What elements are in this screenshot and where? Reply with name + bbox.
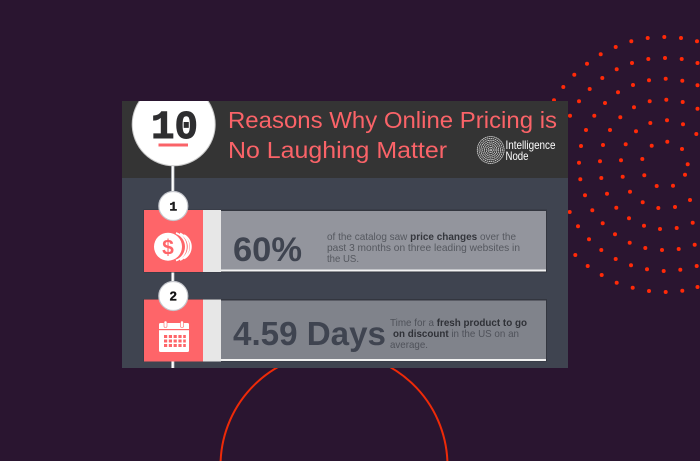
step badge 1 — [159, 192, 188, 220]
icon: calendar — [159, 321, 189, 352]
decorative arc circle — [221, 352, 447, 461]
card 2 coral block — [144, 300, 203, 362]
card 1 grey body — [221, 211, 546, 270]
icon: dollar coins: $ — [162, 236, 174, 260]
card 2 grey body — [221, 300, 546, 359]
card 1 — [144, 210, 547, 272]
timeline connector — [171, 160, 175, 368]
dotted halftone sphere — [552, 35, 700, 294]
card 1 description: of the catalog saw price changes over the — [327, 232, 516, 243]
card 2 description: average. — [390, 340, 428, 351]
step badge 2 — [159, 282, 188, 310]
header band — [122, 101, 568, 178]
card 1 stat: 60% — [233, 231, 302, 269]
card 2 description: Time for a fresh product to go — [390, 318, 527, 329]
title — [228, 107, 557, 163]
card 2 description: on discount in the US on an — [393, 329, 519, 340]
step badge 2: 2 — [170, 288, 177, 304]
icon: dotted sphere — [477, 137, 504, 163]
infographic panel — [122, 83, 568, 368]
card 1 description: the US. — [327, 254, 359, 265]
card 1 description: past 3 months on three leading websites in — [327, 243, 520, 254]
icon: dollar coins — [154, 233, 191, 261]
title: No Laughing Matter — [228, 137, 447, 163]
card 1 description — [327, 232, 520, 265]
logo wordmark: Intelligence — [506, 138, 556, 152]
card 1 coral block — [144, 210, 203, 272]
badge: 10 — [132, 101, 216, 166]
card 2 stat: 4.59 Days — [233, 315, 386, 352]
step badge 1: 1 — [169, 200, 177, 214]
card 2 — [144, 299, 547, 362]
card 2 description — [390, 318, 527, 351]
logo wordmark — [506, 138, 556, 163]
title: Reasons Why Online Pricing is — [228, 107, 557, 133]
badge: 10: 10 — [151, 106, 198, 151]
logo: Intelligence Node — [477, 137, 556, 163]
logo wordmark: Node — [506, 149, 529, 163]
panel body — [122, 178, 568, 368]
